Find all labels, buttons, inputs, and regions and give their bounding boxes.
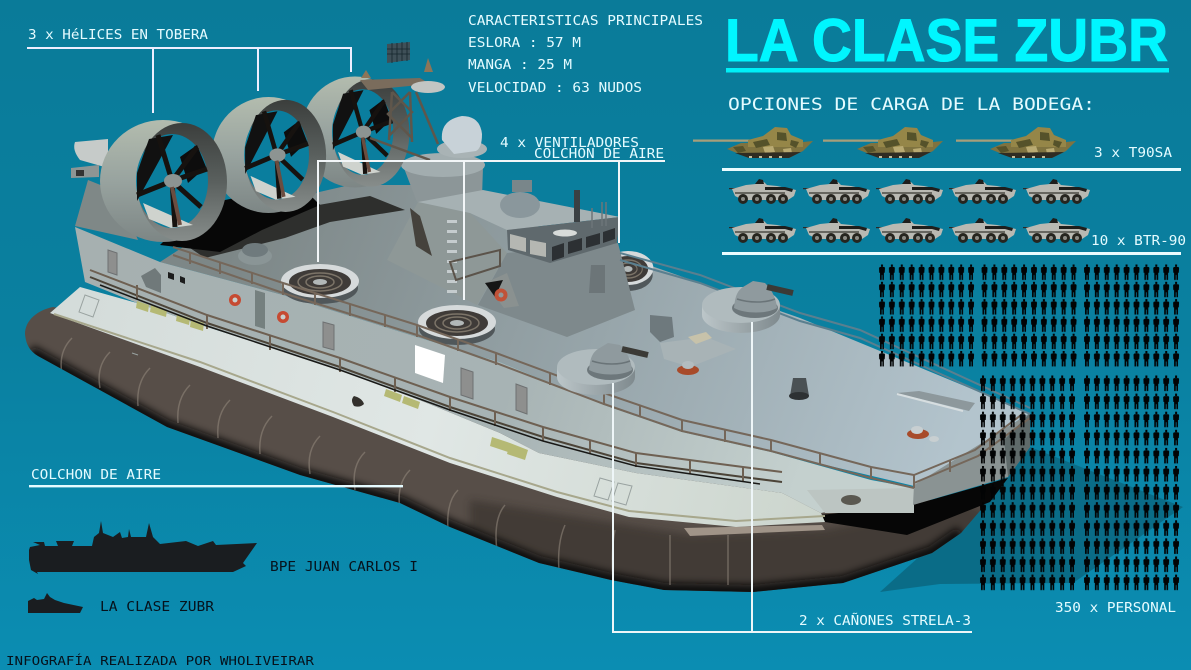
gun turret front <box>557 343 648 395</box>
cargo options heading: OPCIONES DE CARGA DE LA BODEGA: <box>728 95 1095 115</box>
separator line BTR <box>722 252 1181 255</box>
deck equipment <box>650 315 975 442</box>
main characteristics text: ESLORA : 57 M <box>468 36 581 51</box>
BTR vehicles rows <box>729 179 1090 243</box>
deck <box>160 185 1030 486</box>
lower rail <box>90 270 782 482</box>
hull side details <box>108 250 527 414</box>
hull side wall <box>75 227 914 513</box>
vent fan 2 <box>418 305 496 345</box>
credit: INFOGRAFÍA REALIZADA POR WHOLIVEIRAR <box>6 653 315 668</box>
air cushion skirt <box>25 307 1000 600</box>
callout: lift fans: COLCHON DE AIRE <box>534 147 664 162</box>
black slit <box>100 285 760 484</box>
separator line tanks <box>722 168 1181 171</box>
callout: propellers: 3 x HéLICES EN TOBERA <box>28 28 208 43</box>
callout: propellers <box>27 28 351 113</box>
duct rear <box>301 76 409 188</box>
label: Juan Carlos I: BPE JUAN CARLOS I <box>270 560 418 575</box>
main characteristics text: CARACTERISTICAS PRINCIPALES <box>468 14 703 29</box>
gun turret rear <box>702 281 793 333</box>
hovercraft ship <box>25 42 1030 600</box>
bow front <box>807 413 1030 513</box>
BTR label: 10 x BTR-90 <box>1091 234 1186 249</box>
main characteristics text <box>468 14 703 96</box>
size comparison: Juan Carlos I silhouette <box>29 521 257 574</box>
rear vent detail <box>238 243 272 265</box>
callout: cannons <box>613 322 972 632</box>
size comparison: Zubr silhouette <box>28 593 83 613</box>
duct front <box>100 120 227 242</box>
shadow on aft deck <box>190 196 405 258</box>
vent fan 1 <box>281 264 359 304</box>
vent fan 3 <box>603 251 653 291</box>
white square panel <box>415 345 445 383</box>
label: La Clase Zubr: LA CLASE ZUBR <box>100 600 214 615</box>
propeller ducts <box>71 76 409 242</box>
green canisters <box>136 301 528 460</box>
water shadow under bow <box>880 447 1183 592</box>
callout: cannons: 2 x CAÑONES STRELA-3 <box>799 613 971 629</box>
personnel label: 350 x PERSONAL <box>1055 601 1176 616</box>
callout: lift fans <box>318 136 665 300</box>
main characteristics text: MANGA : 25 M <box>468 58 572 73</box>
callout: air cushion: COLCHON DE AIRE <box>31 468 161 483</box>
superstructure <box>387 116 635 337</box>
radar mast <box>360 42 445 160</box>
duct centre <box>212 97 326 213</box>
callout: lift fans: 4 x VENTILADORES <box>500 136 639 151</box>
black underside of bow <box>820 478 1008 535</box>
tanks row <box>693 127 1076 158</box>
tank label: 3 x T90SA <box>1094 146 1172 161</box>
upper rail <box>173 247 1030 488</box>
side ledge <box>50 287 825 527</box>
main characteristics text: VELOCIDAD : 63 NUDOS <box>468 81 642 96</box>
personnel icons 350 x personal <box>877 264 1181 592</box>
engine nacelle <box>71 139 138 240</box>
